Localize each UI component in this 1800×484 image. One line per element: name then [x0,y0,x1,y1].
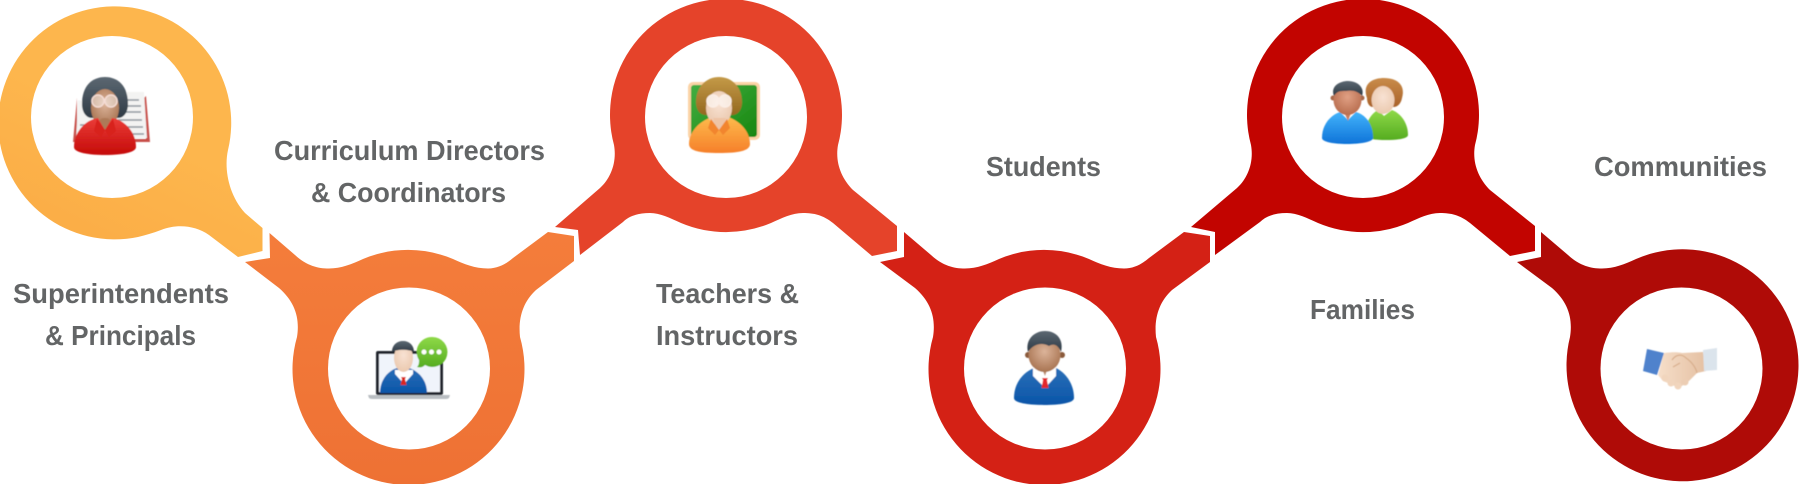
label: Teachers & Instructors [656,278,799,351]
node 3: Teachers & Instructors ring [555,0,897,256]
label: Teachers & Instructors: Instructors [656,320,798,351]
node 5: Families ring [1191,0,1535,256]
icon: family couple [1322,78,1408,144]
label: Curriculum Directors & Coordinators [274,135,545,208]
node 4: Students ring [880,232,1210,484]
icon: handshake [1643,348,1717,390]
node 1: Superintendents & Principals ring [0,6,263,257]
icon: instructor on laptop with chat bubble [368,337,450,399]
node 2: Curriculum Directors ring [245,232,574,484]
label: Teachers & Instructors: Teachers & [656,278,799,309]
label: Curriculum Directors & Coordinators: & Coordinators [311,177,506,208]
label: Superintendents & Principals: & Principals [45,320,196,351]
label: Communities: Communities [1594,151,1767,182]
label: Superintendents & Principals [13,278,229,351]
icon: teacher at green chalkboard [688,77,760,153]
label: Families: Families [1310,294,1415,325]
label: Superintendents & Principals: Superintendents [13,278,229,309]
label: Curriculum Directors & Coordinators: Curriculum Directors [274,135,545,166]
node 6: Communities ring [1517,232,1799,481]
label: Students: Students [986,151,1101,182]
icon: student in blue sweater [1014,331,1074,405]
icon: woman with open book [73,77,150,155]
